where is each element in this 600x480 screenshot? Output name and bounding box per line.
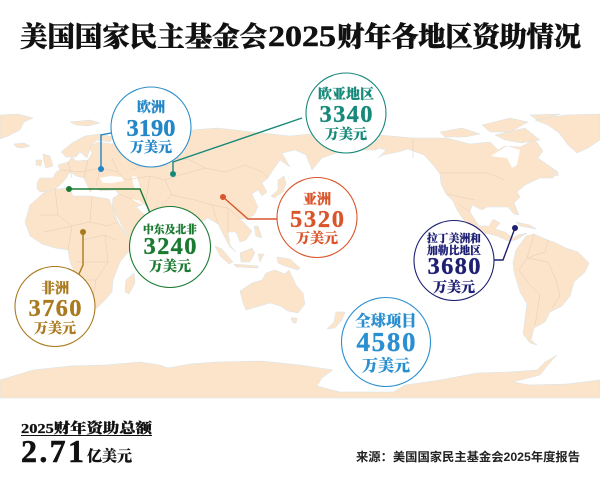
callout: Europe: 欧洲 xyxy=(137,99,165,116)
total funding amount: 亿美元 xyxy=(87,447,132,465)
callout: Europe xyxy=(98,87,191,172)
total funding amount xyxy=(21,433,132,469)
callout: Africa xyxy=(15,229,95,346)
callout: Global projects xyxy=(342,298,430,386)
map: inland seas and bays xyxy=(100,146,520,226)
map: Australia xyxy=(240,270,305,313)
map: Antarctica xyxy=(0,355,600,398)
callout: Middle East and North Africa: 中东及北非 xyxy=(143,222,197,236)
total funding amount: 2.71 xyxy=(21,433,84,469)
map: Arctic islands xyxy=(440,114,560,143)
title: 美国国家民主基金会 xyxy=(20,21,268,52)
map: Tasmania xyxy=(291,318,297,323)
callout: Africa: 非洲 xyxy=(41,280,69,297)
callout: Latin America and Caribbean xyxy=(414,220,518,300)
total funding label: 2025财年资助总额 xyxy=(21,420,153,437)
callout: Asia: 万美元 xyxy=(296,230,338,247)
callout: Asia xyxy=(220,178,357,258)
callout: Africa: 万美元 xyxy=(34,320,76,337)
map: Cuba xyxy=(516,222,536,229)
map: Svalbard xyxy=(70,120,100,126)
map: Japan xyxy=(271,176,286,198)
callout: Europe: 万美元 xyxy=(130,139,172,156)
title xyxy=(20,20,581,53)
callout: Middle East and North Africa: 3240 xyxy=(144,233,196,260)
map: Sulawesi and Philippines xyxy=(254,226,264,262)
callout: Asia: 5320 xyxy=(290,206,344,233)
callout: Middle East and North Africa: 万美元 xyxy=(149,258,191,275)
callout: Latin America and Caribbean: 加勒比地区 xyxy=(427,243,481,257)
map: Borneo xyxy=(240,248,255,262)
callout: Europe: 3190 xyxy=(126,115,176,142)
map: New Zealand xyxy=(327,312,345,329)
callout: Global projects: 4580 xyxy=(356,327,416,357)
callout: Eurasia xyxy=(170,73,386,177)
map: New Guinea xyxy=(277,257,300,270)
world map xyxy=(0,114,600,398)
callout: Eurasia: 万美元 xyxy=(325,126,367,143)
map: Newfoundland xyxy=(552,170,558,176)
map: Greenland west part xyxy=(535,114,600,153)
map: Scandinavia xyxy=(61,134,113,158)
title: 财年各地区资助情况 xyxy=(337,21,581,52)
map: Britain and Ireland xyxy=(36,154,53,168)
callout: Asia: 亚洲 xyxy=(303,191,331,208)
map: Africa xyxy=(25,188,136,308)
callout: Africa: 3760 xyxy=(28,295,82,322)
callout: Latin America and Caribbean: 万美元 xyxy=(433,279,475,296)
map: Sri Lanka xyxy=(183,240,187,247)
map: Greenland east part xyxy=(0,114,33,139)
map: Madagascar xyxy=(125,273,135,294)
callout: Eurasia: 3340 xyxy=(320,101,372,128)
map: Alaska and Canada xyxy=(375,135,558,241)
map: Iceland xyxy=(14,143,30,148)
callout: Middle East and North Africa xyxy=(66,186,210,288)
map: country borders xyxy=(40,138,560,325)
source note: 来源：美国国家民主基金会2025年度报告 xyxy=(356,449,580,464)
callout: Global projects: 万美元 xyxy=(362,356,410,375)
callout: Eurasia: 欧亚地区 xyxy=(318,86,374,103)
title: 2025 xyxy=(268,20,336,53)
callout: Latin America and Caribbean: 拉丁美洲和 xyxy=(427,231,481,245)
map: Sumatra and Java xyxy=(215,246,258,268)
callout: Global projects: 全球项目 xyxy=(355,312,417,330)
map: South America xyxy=(513,234,589,345)
callout: Latin America and Caribbean: 3680 xyxy=(428,253,480,280)
map: Eurasia xyxy=(37,128,386,252)
